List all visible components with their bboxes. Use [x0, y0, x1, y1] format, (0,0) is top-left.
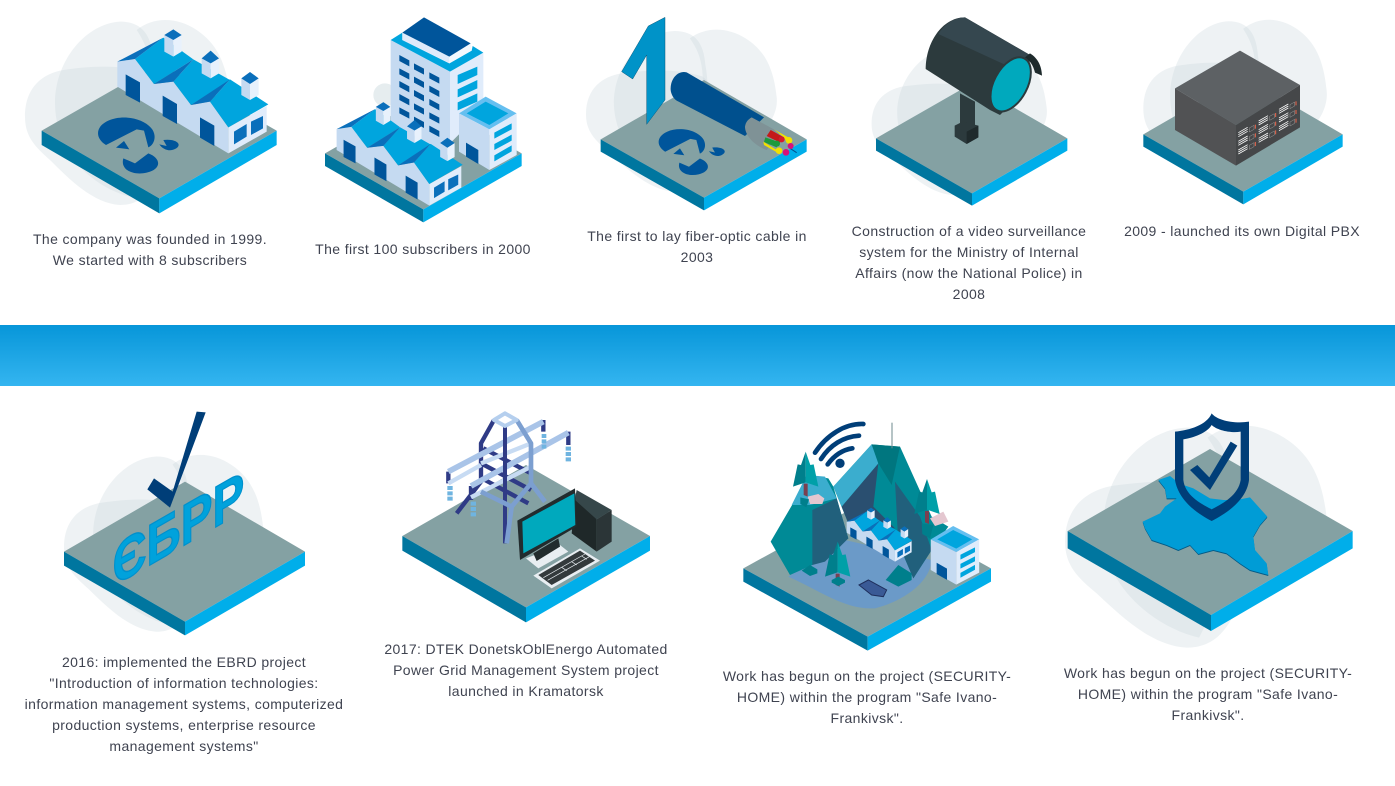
- caption: security home project: Frankivsk".: [831, 710, 903, 726]
- caption: DTEK project: 2017: DTEK DonetskOblEnergo Automated: [384, 641, 668, 657]
- caption: DTEK project: Power Grid Management System project: [393, 662, 659, 678]
- caption: EBRD project: "Introduction of information technologies:: [49, 675, 319, 691]
- caption: EBRD project: 2016: implemented the EBRD project: [62, 654, 306, 670]
- caption: security home project: HOME) within the program "Safe Ivano-: [737, 689, 997, 705]
- caption: video surveillance: 2008: [953, 286, 985, 302]
- caption: video surveillance: Construction of a video surveillance: [852, 223, 1086, 239]
- banner: [0, 325, 1395, 386]
- caption: fiber-optic cable: 2003: [681, 249, 713, 265]
- caption: security home project: Work has begun on the project (SECURITY-: [723, 668, 1011, 684]
- caption: founded 1999: The company was founded in 1999.: [33, 231, 267, 247]
- icon: power pylon and computer: [402, 413, 650, 622]
- caption: fiber-optic cable: The first to lay fiber-optic cable in: [587, 228, 807, 244]
- icon: office tower and houses: [325, 17, 522, 222]
- icon: EBRD checkmark: [64, 412, 305, 635]
- caption: EBRD project: production systems, enterprise resource: [52, 717, 316, 733]
- caption: DTEK project: launched in Kramatorsk: [448, 683, 604, 699]
- caption: safe Ivano-Frankivsk: HOME) within the program "Safe Ivano-: [1078, 686, 1338, 702]
- caption: video surveillance: Affairs (now the National Police) in: [855, 265, 1083, 281]
- caption: safe Ivano-Frankivsk: Work has begun on the project (SECURITY-: [1064, 665, 1352, 681]
- caption: EBRD project: information management systems, computerized: [25, 696, 343, 712]
- caption: digital PBX: 2009 - launched its own Digital PBX: [1124, 223, 1360, 239]
- icon: surveillance camera: [872, 17, 1067, 206]
- caption: safe Ivano-Frankivsk: Frankivsk".: [1172, 707, 1244, 723]
- icon: houses on platform, founded 1999: [25, 20, 277, 213]
- isometric EBRD letters: ЄБРР: [113, 459, 244, 600]
- icon: fiber-optic cable with numeral one: [586, 17, 807, 210]
- caption: video surveillance: system for the Ministry of Internal: [859, 244, 1079, 260]
- caption: EBRD project: management systems": [109, 738, 259, 754]
- icon: digital PBX server: [1143, 20, 1343, 204]
- caption: founded 1999: We started with 8 subscribers: [53, 252, 247, 268]
- icon: mountain town with wifi: [743, 423, 991, 651]
- caption: first 100 subscribers: The first 100 subscribers in 2000: [315, 241, 531, 257]
- icon: shield over regional map: [1065, 413, 1353, 648]
